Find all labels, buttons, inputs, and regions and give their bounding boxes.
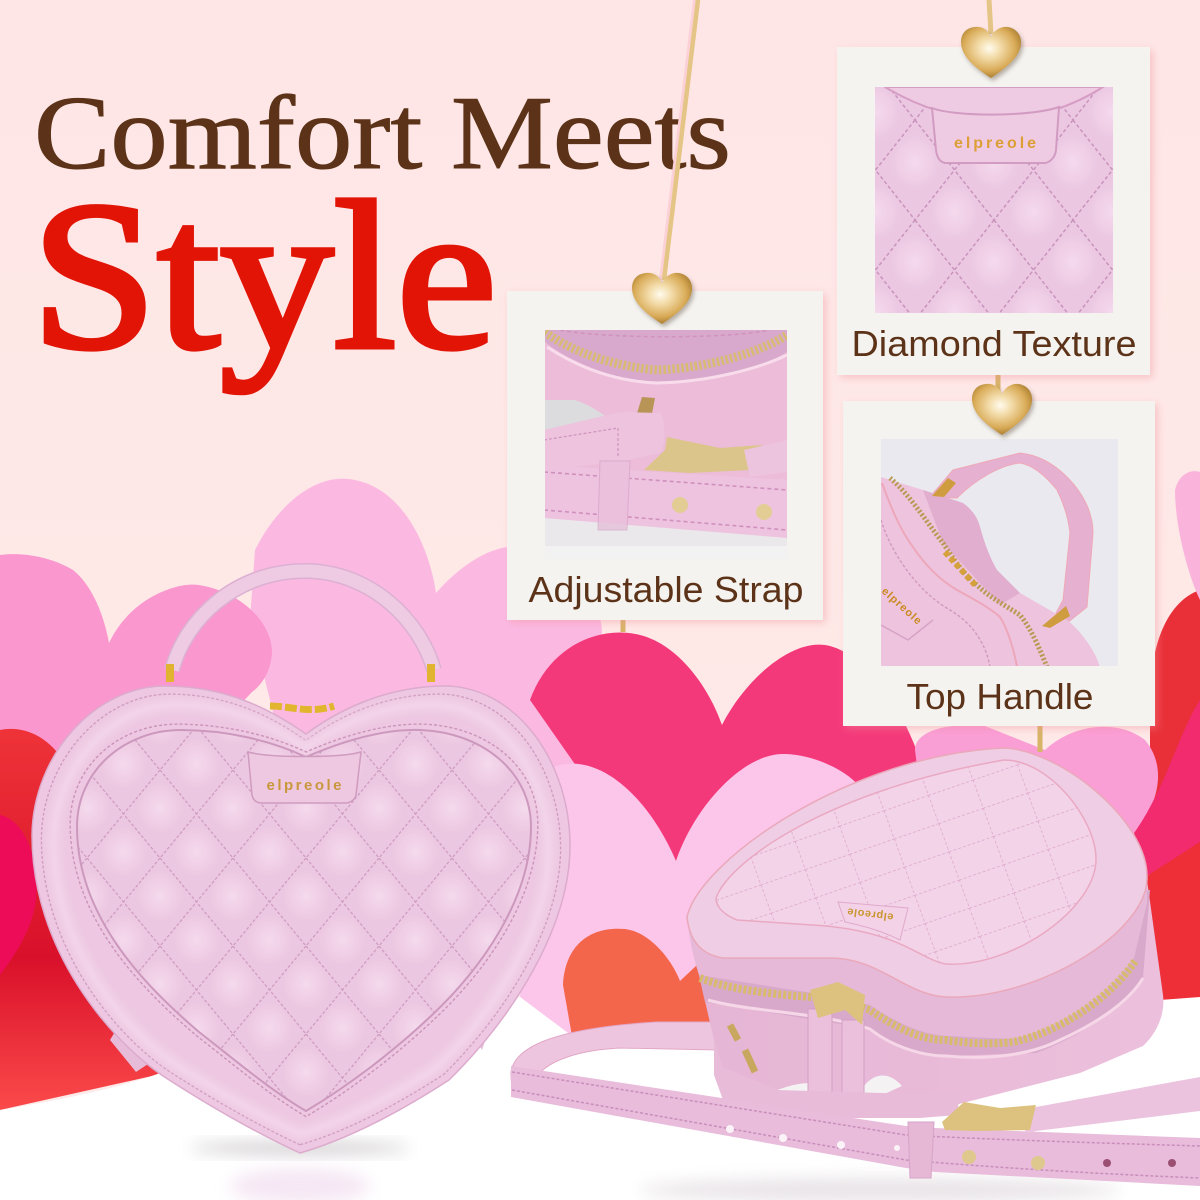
- outer rim: [32, 686, 570, 1153]
- photo: handle detail: elpreole: [879, 585, 924, 628]
- handle edge: [172, 571, 434, 670]
- caption: Top Handle: [906, 676, 1094, 717]
- zipper slider: [810, 982, 865, 1025]
- paper hearts backdrop: [0, 471, 1200, 1110]
- title: [31, 74, 731, 393]
- zipper pulls: [808, 1009, 864, 1094]
- strap holes: [726, 1125, 900, 1151]
- icon: gold heart strap: [632, 273, 692, 324]
- strap right tail: [1022, 1077, 1200, 1133]
- floor shadow: [640, 1178, 1120, 1200]
- logo tab: [248, 752, 361, 803]
- rim band: [687, 876, 1147, 1039]
- quilted panel: [77, 730, 531, 1111]
- icon: gold heart handle: [972, 384, 1032, 435]
- chain: below strap card: [620, 620, 626, 632]
- chain: top handle: [996, 375, 1000, 392]
- floor shadow: [190, 1143, 410, 1153]
- strap keeper: [908, 1122, 934, 1178]
- gold zipper: [270, 706, 334, 710]
- photo: handle detail: [879, 439, 1118, 667]
- panel: adjustable strap: [507, 291, 823, 620]
- floor reflection: [230, 1168, 370, 1200]
- logo tab: [838, 902, 908, 940]
- strap front: [511, 1066, 1200, 1186]
- strap back loop: [511, 1022, 718, 1097]
- icon: gold heart diamond: [961, 27, 1021, 78]
- zipper band: [699, 890, 1150, 1056]
- title line 2: Style: [31, 158, 497, 393]
- white floor: [0, 997, 1200, 1200]
- bag: side view heart: [511, 748, 1200, 1200]
- title line 1: Comfort Meets: [34, 74, 731, 191]
- logo: elpreole: [266, 777, 342, 794]
- gold hook: [730, 1025, 755, 1072]
- caption: Adjustable Strap: [528, 569, 804, 610]
- side tabs: [110, 1026, 490, 1072]
- chain: behind bag: [1038, 725, 1042, 752]
- cutout under zip: [772, 1076, 902, 1096]
- quilted top: [716, 760, 1096, 964]
- chain: diamond texture: [989, 0, 991, 34]
- photo: quilted leather: elpreole: [954, 135, 1036, 152]
- bag: front view heart: [32, 571, 570, 1200]
- zipper piping: [708, 978, 1143, 1057]
- handle: [172, 571, 434, 670]
- panel: top handle: [843, 401, 1155, 726]
- gold clasp: [942, 1102, 1036, 1131]
- caption: Diamond Texture: [852, 323, 1136, 364]
- logo: elpreole: [846, 905, 894, 923]
- chain: adjustable strap: [662, 0, 698, 280]
- strap stitch: [512, 1072, 1200, 1178]
- handle clips: [170, 664, 431, 682]
- bag body: [699, 880, 1163, 1118]
- front loop: [714, 1040, 960, 1118]
- zipper: [700, 960, 1136, 1043]
- rim stitch: [41, 694, 561, 1145]
- strap holes dark: [1103, 1159, 1176, 1167]
- panel: diamond texture: [837, 47, 1150, 375]
- photo: quilted leather: [875, 87, 1113, 313]
- gold studs: [962, 1150, 1045, 1170]
- stitch by panel: [70, 724, 538, 1117]
- lid top face: [687, 748, 1147, 997]
- rim highlight: [54, 705, 548, 1134]
- photo: strap detail: [544, 330, 787, 559]
